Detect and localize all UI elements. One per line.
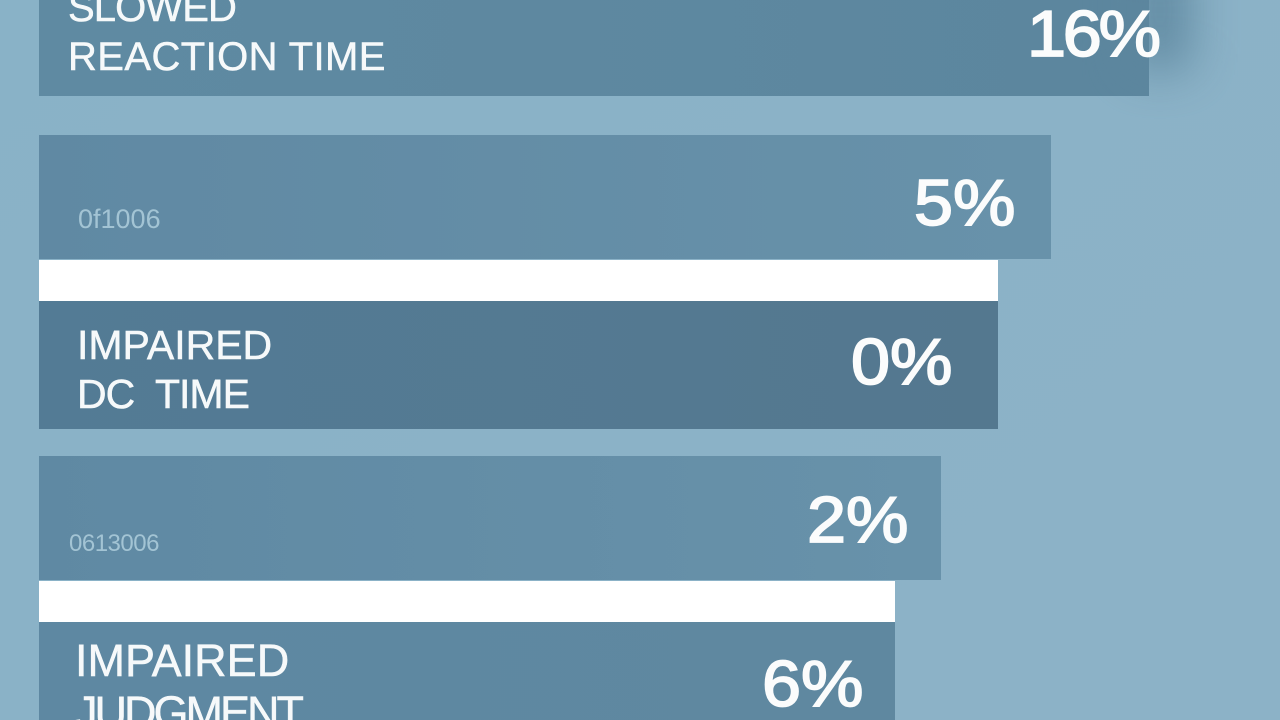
label: impaired dc time [77,322,272,417]
value: 5%: 5% [914,166,1015,239]
label: slowed reaction time [68,0,386,79]
bar: slowed reaction time [39,0,1149,96]
value: 6%: 6% [762,647,863,720]
bar end shadow [1130,0,1190,70]
value: 2%: 2% [807,483,908,556]
bar: second bar [39,135,1051,259]
small label: 0613006 [69,530,159,557]
label: impaired judgment [75,635,304,720]
label: impaired dc time: DC TIME [77,371,249,417]
white strip [39,581,895,622]
bar: fourth bar [39,456,941,580]
value: 0%: 0% [851,325,952,398]
label: slowed reaction time: REACTION TIME [68,35,386,79]
bar: impaired dc time [39,301,998,429]
label: impaired judgment: IMPAIRED [75,635,289,686]
white strip [39,260,998,301]
bar: impaired judgment [39,622,895,720]
label: impaired dc time: IMPAIRED [77,322,272,368]
small label: 0f1006 [78,204,161,234]
